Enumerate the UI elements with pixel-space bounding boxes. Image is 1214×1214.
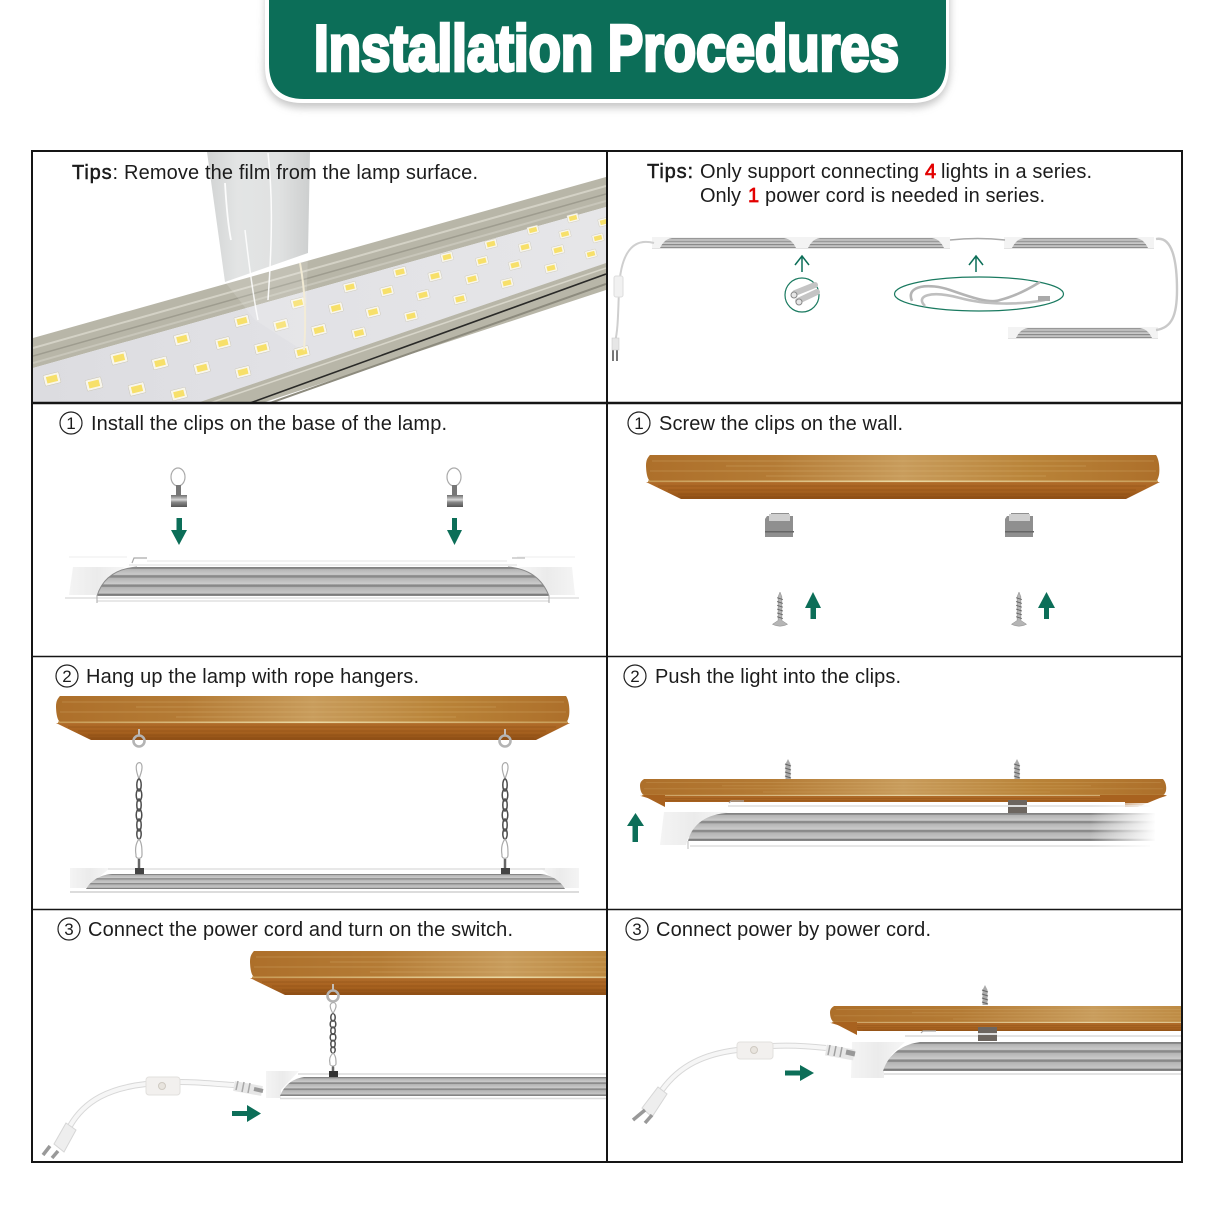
panel: left step 3 [42, 917, 606, 1159]
screws [772, 592, 788, 626]
second screw [1011, 592, 1027, 626]
panel: tips connecting in series [612, 161, 1177, 361]
panel: tips remove film: Remove the film from the lamp surface. [124, 162, 478, 184]
wood beam [640, 779, 1167, 807]
panel: right step 1 [628, 412, 1160, 626]
arrow: right [785, 1065, 814, 1081]
header banner [264, 0, 950, 108]
icon: right clip [447, 468, 463, 507]
table frame [32, 151, 1182, 1162]
four connected lamps diagram [612, 237, 1177, 361]
tips text: Only support connecting [700, 161, 919, 183]
tips text: 1 [748, 185, 759, 207]
step text: 2 [630, 667, 640, 686]
screw shank [982, 985, 988, 1005]
lamp [70, 868, 579, 892]
step text: Install the clips on the base of the lamp. [91, 413, 447, 435]
arrow: up left [805, 592, 821, 619]
step text: Screw the clips on the wall. [659, 413, 903, 435]
wood beam [250, 951, 606, 995]
clip [1008, 800, 1027, 813]
peeled film [207, 152, 310, 352]
panel: left step 2 [56, 665, 579, 892]
tips text: Only [700, 185, 741, 207]
step text: Push the light into the clips. [655, 666, 901, 688]
step text: 3 [632, 920, 642, 939]
eye hooks [134, 729, 510, 746]
step text: 1 [66, 414, 76, 433]
wood beam [56, 696, 570, 740]
arrow: cord [969, 256, 983, 272]
tips text: 4 [925, 161, 936, 183]
arrow: up [627, 813, 644, 842]
wood beam [646, 455, 1160, 499]
icon: connector tubes [785, 278, 819, 312]
step text: 3 [64, 920, 74, 939]
arrow: right [232, 1105, 261, 1122]
step text: Connect the power cord and turn on the switch. [88, 919, 513, 941]
wood beam [830, 1006, 1214, 1035]
power cord with switch and plug [43, 1077, 263, 1158]
arrow: right down [447, 518, 462, 545]
rope hanger chains [136, 763, 508, 868]
step text: 2 [62, 667, 72, 686]
step text: Connect power by power cord. [656, 919, 931, 941]
panel: tips remove film [33, 152, 610, 403]
screw shanks [785, 759, 1020, 779]
panel: right step 3 [626, 918, 1214, 1123]
step text: 1 [634, 414, 644, 433]
wall clips [765, 513, 1034, 537]
arrow: connector [795, 256, 809, 272]
tips text: Tips: [647, 161, 693, 183]
icon: left clip [171, 468, 187, 507]
tips text [647, 161, 1092, 207]
panel: left step 1 [60, 412, 579, 603]
tips text: lights in a series. [941, 161, 1092, 183]
icon: extension cord [894, 277, 1064, 311]
power cord with switch and plug [633, 1042, 855, 1123]
lamp [851, 1027, 1187, 1078]
tips text: power cord is needed in series. [765, 185, 1045, 207]
lamp [266, 1071, 606, 1098]
lamp surface photo [33, 152, 610, 403]
arrow: up right [1038, 592, 1055, 619]
lamp [65, 557, 579, 603]
lamp pushed into clips [660, 801, 1156, 852]
eye hook and chain [328, 984, 338, 1072]
arrow: left down [171, 518, 187, 545]
panel: right step 2 [624, 665, 1167, 852]
title: Installation Procedures [314, 12, 899, 84]
LED chips [43, 213, 610, 401]
tips text: Tips: [72, 162, 118, 184]
step text: Hang up the lamp with rope hangers. [86, 666, 419, 688]
